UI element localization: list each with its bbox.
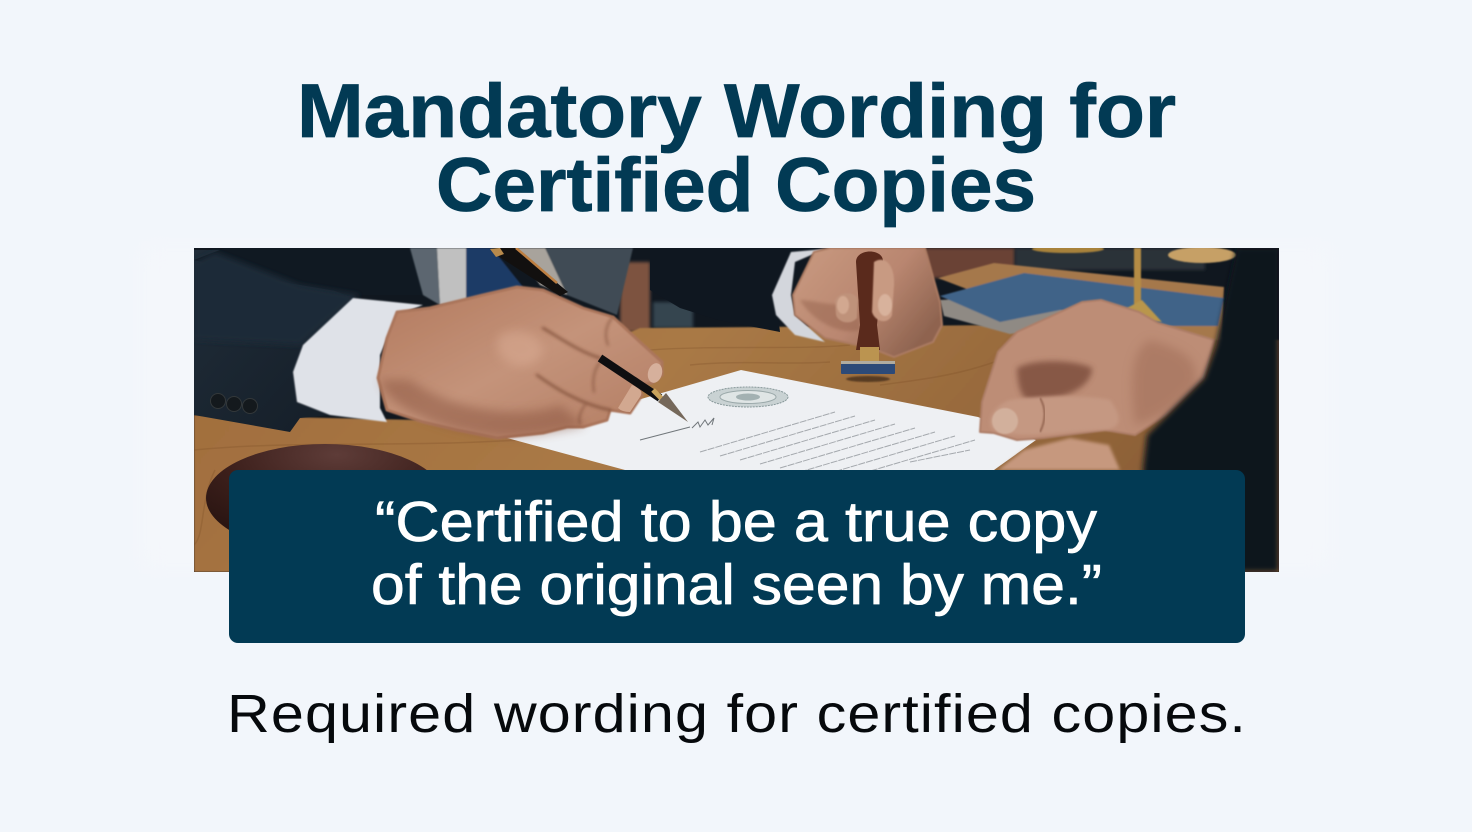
lower blurred hand	[998, 438, 1120, 470]
wood grain	[194, 345, 1000, 545]
fountain pen	[490, 248, 688, 422]
quote box	[229, 470, 1245, 643]
photo: hands signing and stamping a document	[194, 245, 1279, 572]
quote box: “Certified to be a true copy	[375, 490, 1098, 554]
right foreground figure	[1143, 248, 1279, 572]
stamp	[841, 252, 895, 382]
writing hand	[378, 287, 664, 438]
stamping hand	[793, 248, 942, 357]
title	[297, 69, 1176, 228]
left shirt cuff	[293, 298, 423, 422]
document	[507, 370, 1036, 480]
embossed seal	[708, 387, 788, 407]
brass scales	[1032, 245, 1236, 322]
dark wooden disc	[206, 444, 427, 530]
right hand holding the page	[980, 300, 1214, 440]
title: Certified Copies	[436, 143, 1036, 228]
title: Mandatory Wording for	[297, 69, 1176, 154]
left suit sleeve	[194, 250, 358, 432]
right shirt cuff	[772, 249, 825, 342]
fingers gripping the stamp	[835, 260, 894, 322]
quote box: of the original seen by me.”	[371, 553, 1102, 617]
shirt and tie	[410, 248, 633, 315]
right suit sleeve	[650, 260, 780, 332]
infographic canvas	[194, 82, 1279, 743]
blue book on wooden tray	[938, 263, 1224, 340]
caption: Required wording for certified copies.	[227, 684, 1247, 744]
